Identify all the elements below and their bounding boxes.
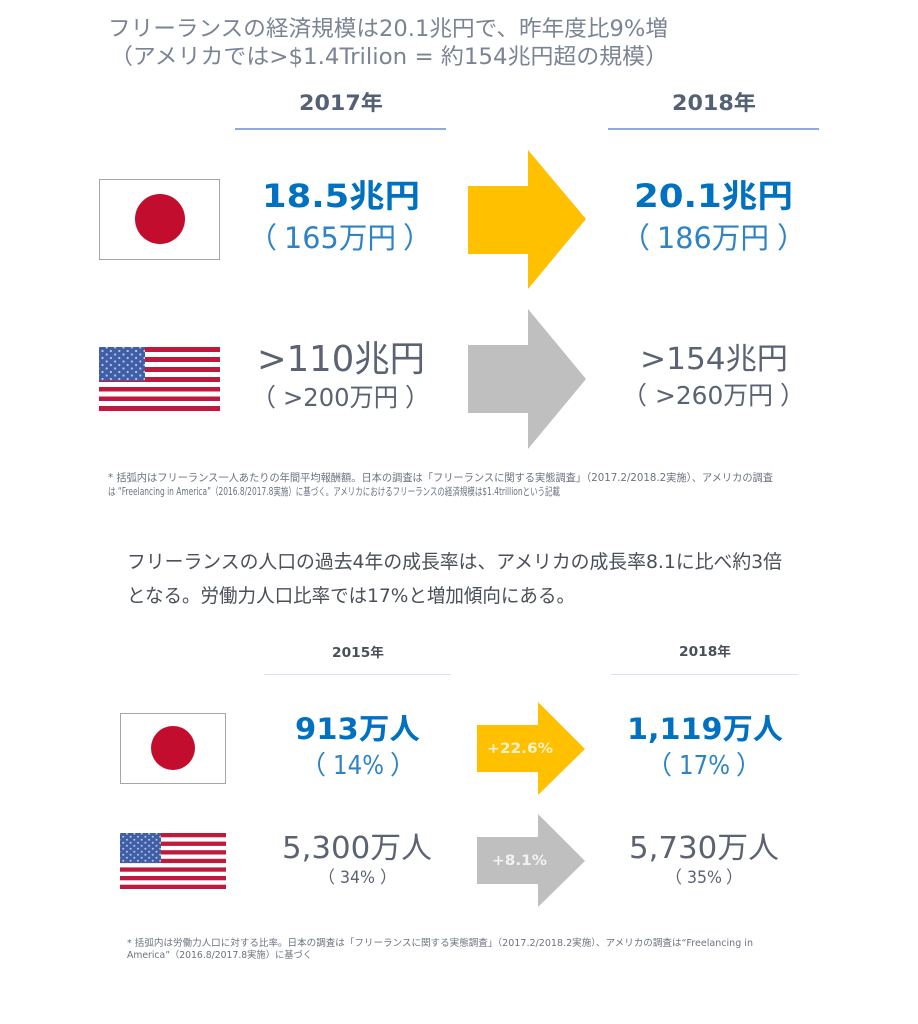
value: US 2018: （ [665,868,682,888]
value: US 2018 [622,342,805,410]
footnote: economic scale: は “Freelancing in America”（2016.8/2017.8実施）に基づく。アメリカにおけるフリーランスの経済規模は$1.4trillionという記載 [108,485,560,498]
value: Japan 2015: 14% [333,751,384,781]
value: Japan 2015 [295,712,420,781]
column heading: 2017: 2017年 [299,91,383,115]
footnote: population: * 括弧内は労働力人口に対する比率。日本の調査は「フリーランスに関する実態調査」（2017.2/2018.2実施）、アメリカの調査は“Freelancing in [127,937,753,949]
icon: US flag [99,347,220,411]
text block: population summary [127,551,782,607]
value: Japan 2018: ） [736,751,762,781]
value: US 2018: （ [622,381,647,410]
value: US 2018: >154兆円 [640,342,788,377]
value: Japan 2018: 17% [679,751,730,781]
value: Japan 2015: ） [390,751,416,781]
text block: population summary: フリーランスの人口の過去4年の成長率は、アメリカの成長率8.1に比べ約3倍 [127,551,782,573]
icon: US flag [120,833,226,889]
arrow: Japan population growth [477,702,585,795]
icon: Japan flag [100,180,220,260]
arrow: US population growth [477,814,585,907]
value: Japan 2015: （ [300,751,326,781]
value: US 2018: ） [780,381,805,410]
value: Japan 2017: （ [248,221,277,255]
footnote: economic scale: * 括弧内はフリーランス一人あたりの年間平均報酬額。日本の調査は「フリーランスに関する実態調査」（2017.2/2018.2実施）、アメリカの調査 [108,471,773,484]
column heading: 2018: 2018年 [672,91,756,115]
value: US 2017: ） [405,383,430,412]
column heading: 2015: 2015年 [332,645,384,661]
value: US 2018: 5,730万人 [629,831,779,866]
value: US 2017 [251,339,430,412]
value: US 2015: 5,300万人 [282,831,432,866]
value: US 2017: （ [251,383,276,412]
value: US 2015: ） [380,868,397,888]
value: US 2015 [282,831,432,888]
value: Japan 2018 [621,177,806,255]
title: economic scale: フリーランスの経済規模は20.1兆円で、昨年度比9%増 [108,17,668,42]
arrow: Japan population growth: +22.6% [487,741,553,757]
value: US 2018: >260万円 [655,381,773,410]
value: Japan 2018: 1,119万人 [627,712,783,746]
value: Japan 2018: （ [621,221,650,255]
column heading: 2018: 2018年 [679,644,731,660]
value: US 2017: >200万円 [283,383,398,412]
icon: Japan flag [120,714,226,784]
value: Japan 2017: ） [403,221,432,255]
value: US 2018 [629,831,779,888]
title: economic scale: （アメリカでは>$1.4Trilion = 約154兆円超の規模） [110,45,668,70]
value: US 2017: >110兆円 [257,339,425,380]
value: Japan 2018 [627,712,783,781]
panel: freelance population [120,551,798,961]
panel: economic scale [99,17,819,498]
footnote: population [127,937,753,961]
arrow: US growth [468,309,586,449]
value: US 2015: 34% [340,868,375,888]
value: Japan 2018: （ [646,751,672,781]
title: economic scale [108,17,668,70]
value: Japan 2018: ） [777,221,806,255]
value: US 2018: ） [726,868,743,888]
arrow: US population growth: +8.1% [492,853,547,869]
arrow: Japan growth [468,150,586,289]
value: Japan 2015: 913万人 [295,712,420,746]
value: US 2015: （ [318,868,335,888]
text block: population summary: となる。労働力人口比率では17%と増加傾向にある。 [127,585,575,607]
value: Japan 2018: 20.1兆円 [634,177,793,215]
value: Japan 2017 [248,177,432,255]
value: Japan 2017: 18.5兆円 [262,177,420,215]
value: US 2018: 35% [687,868,722,888]
value: Japan 2018: 186万円 [657,221,769,255]
footnote: economic scale [108,471,773,498]
value: Japan 2017: 165万円 [284,221,396,255]
footnote: population: America”（2016.8/2017.8実施）に基づく [127,949,312,961]
